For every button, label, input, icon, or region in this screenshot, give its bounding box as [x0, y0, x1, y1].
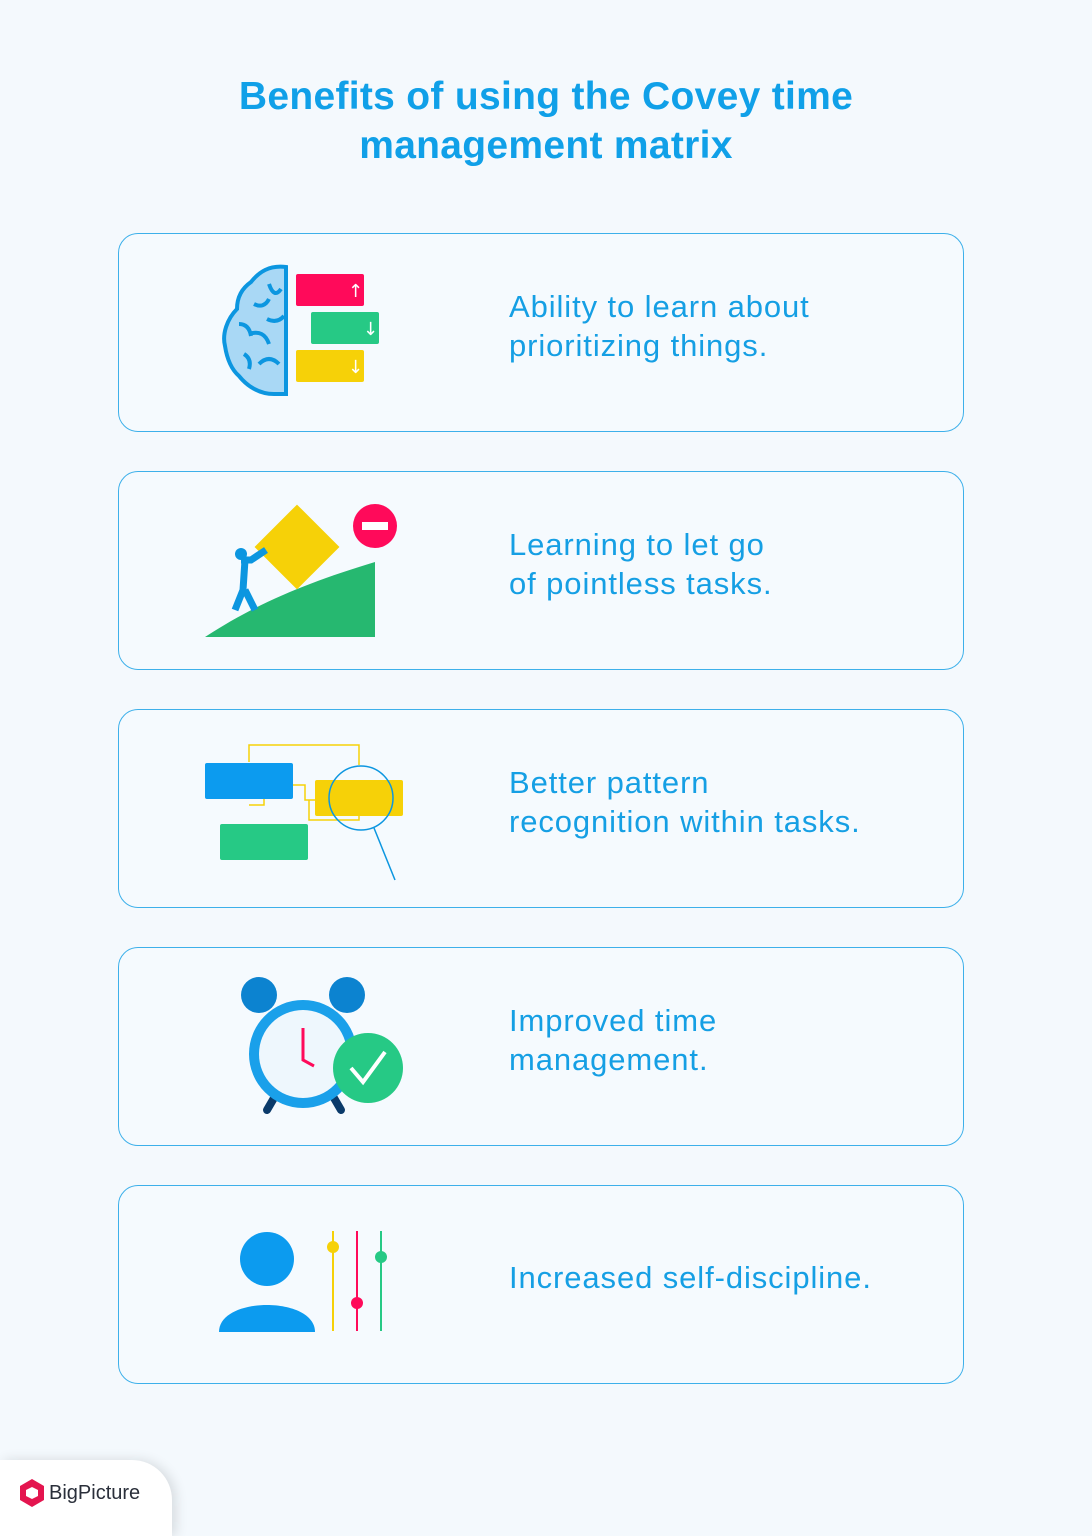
icon: pushing block uphill [205, 504, 397, 637]
text: of pointless tasks. [509, 566, 772, 600]
icon: person with sliders [219, 1231, 387, 1332]
icon: alarm clock with check [241, 977, 403, 1114]
text: prioritizing things. [509, 328, 768, 362]
logo [0, 1460, 172, 1536]
panel: time [118, 947, 964, 1146]
icon: brain with priority bars [222, 264, 379, 396]
panel: pattern [118, 709, 964, 908]
icon: hexagon [20, 1479, 44, 1507]
text: recognition within tasks. [509, 804, 861, 838]
text [509, 1002, 717, 1076]
title: management matrix [359, 124, 733, 167]
icon: brain with priority bars: ↑ [348, 281, 363, 302]
text [509, 526, 772, 600]
icon: brain with priority bars: ↓ [348, 357, 363, 378]
text: Ability to learn about [509, 288, 810, 324]
logo: BigPicture [49, 1482, 140, 1504]
text [509, 764, 861, 838]
text: Better pattern [509, 764, 709, 800]
text [509, 288, 810, 362]
icon: connected blocks with magnifier [205, 744, 403, 880]
title [239, 75, 853, 167]
text: Increased self-discipline. [509, 1260, 872, 1295]
text: management. [509, 1042, 708, 1076]
text: Learning to let go [509, 526, 765, 562]
icon: brain with priority bars: ↓ [363, 319, 378, 340]
text: Improved time [509, 1002, 717, 1038]
panel: prioritizing [118, 233, 964, 432]
panel: let go [118, 471, 964, 670]
panel: discipline [118, 1185, 964, 1384]
title: Benefits of using the Covey time [239, 75, 853, 118]
